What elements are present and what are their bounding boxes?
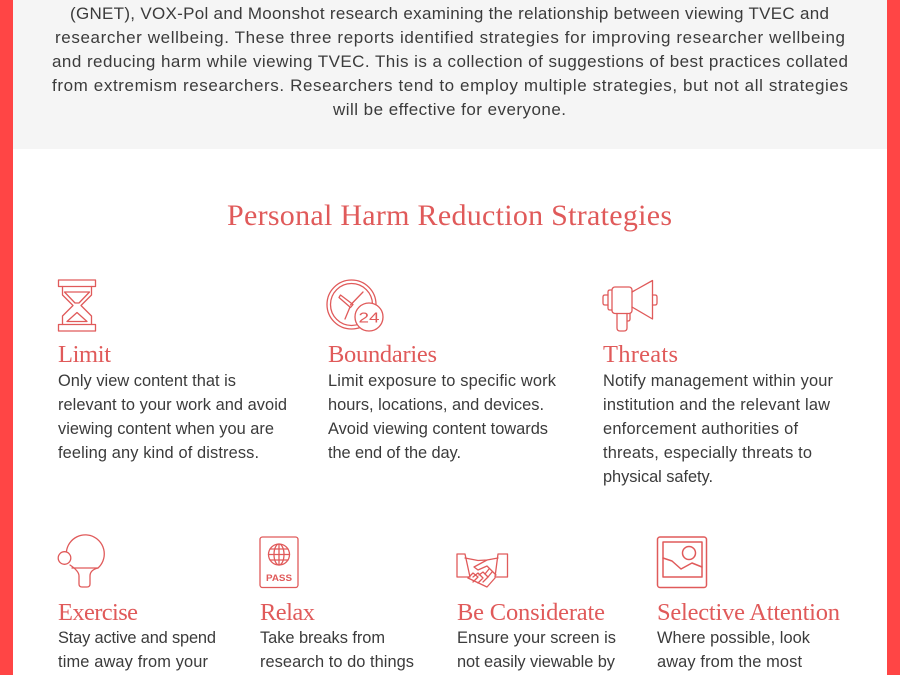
relax text: research to do things	[260, 653, 414, 671]
icon: picture frame	[658, 537, 706, 588]
threats text: threats, especially threats to	[603, 444, 812, 462]
intro text: (GNET), VOX-Pol and Moonshot research examining the relationship between viewing TVEC and	[70, 4, 829, 23]
be considerate text: Ensure your screen is	[457, 629, 616, 647]
threats text: institution and the relevant law	[603, 396, 830, 414]
boundaries text: hours, locations, and devices.	[328, 396, 544, 414]
relax text: Take breaks from	[260, 629, 385, 647]
limit text	[58, 372, 287, 462]
icon: 24 hour clock: 24	[358, 310, 380, 326]
relax title: Relax	[260, 599, 315, 626]
intro text: from extremism researchers. Researchers tend to employ multiple strategies, but not all strategies	[52, 76, 848, 95]
exercise title: Exercise	[58, 599, 138, 626]
threats text: enforcement authorities of	[603, 420, 798, 438]
exercise text: Stay active and spend	[58, 629, 216, 647]
be considerate text	[457, 629, 616, 671]
selective attention text: Where possible, look	[657, 629, 811, 647]
intro text	[52, 4, 848, 119]
boundaries title: Boundaries	[328, 341, 437, 368]
icon: passport	[260, 537, 298, 588]
exercise text: time away from your	[58, 653, 209, 671]
icon: hourglass	[58, 280, 96, 331]
threats text: physical safety.	[603, 468, 713, 486]
intro text: and reducing harm while viewing TVEC. This is a collection of suggestions of best practices collated	[52, 52, 848, 71]
boundaries text: the end of the day.	[328, 444, 461, 462]
exercise text	[58, 629, 216, 671]
icon: passport: PASS	[266, 573, 292, 584]
boundaries text: Avoid viewing content towards	[328, 420, 548, 438]
boundaries text: Limit exposure to specific work	[328, 372, 557, 390]
selective attention text	[657, 629, 811, 671]
be considerate title: Be Considerate	[457, 599, 605, 626]
icon: megaphone	[603, 280, 657, 331]
intro text: researcher wellbeing. These three reports identified strategies for improving researcher wellbeing	[55, 28, 845, 47]
selective attention text: away from the most	[657, 653, 802, 671]
limit text: Only view content that is	[58, 372, 236, 390]
panel: exercise	[58, 535, 216, 671]
icon: handshake	[457, 554, 508, 587]
icon: table tennis paddle	[58, 535, 104, 587]
panel: limit	[58, 280, 287, 462]
be considerate text: not easily viewable by	[457, 653, 616, 671]
limit text: feeling any kind of distress.	[58, 444, 259, 462]
selective attention title: Selective Attention	[657, 599, 840, 626]
relax text	[260, 629, 414, 671]
threats title: Threats	[603, 341, 678, 368]
limit text: relevant to your work and avoid	[58, 396, 287, 414]
panel: introduction	[13, 0, 887, 149]
intro text: will be effective for everyone.	[332, 100, 566, 119]
panel: threats	[603, 280, 834, 486]
panel: boundaries	[327, 280, 557, 462]
threats text	[603, 372, 834, 486]
boundaries text	[328, 372, 557, 462]
limit title: Limit	[58, 341, 111, 368]
panel: relax	[260, 537, 414, 671]
panel: selective attention	[657, 537, 840, 671]
icon: 24 hour clock	[327, 280, 383, 331]
limit text: viewing content when you are	[58, 420, 274, 438]
panel: be considerate	[457, 554, 616, 671]
heading: Personal Harm Reduction Strategies	[227, 199, 672, 232]
threats text: Notify management within your	[603, 372, 834, 390]
